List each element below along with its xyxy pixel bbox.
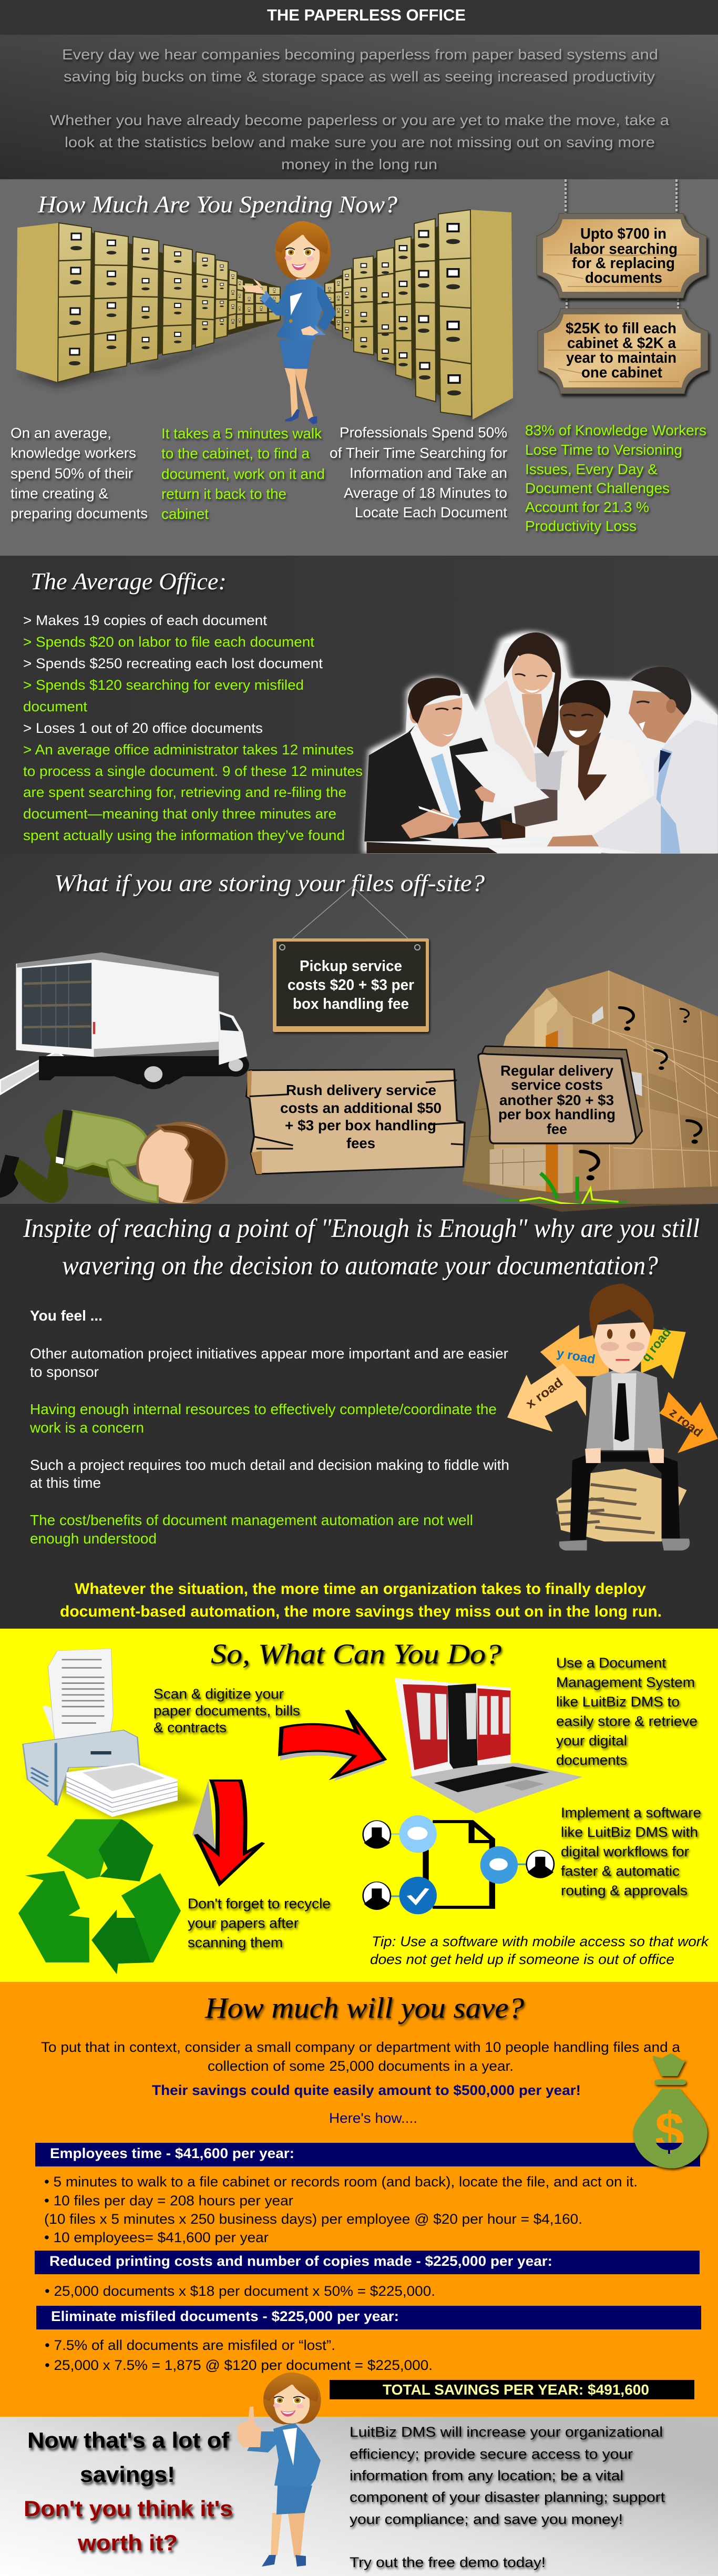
panel: the average office <box>0 556 718 854</box>
text: you feel reasons: to sponsor <box>30 1364 99 1380</box>
text: luitbiz dms benefits <box>350 2424 665 2570</box>
illustration: confused man with road arrows: x road <box>524 1375 566 1412</box>
text: versioning issues: Lose Time to Versioning <box>525 442 682 458</box>
heading: how much are you spending: How Much Are You Spending Now? <box>37 191 397 218</box>
arrow: scan to laptop <box>280 1710 385 1781</box>
text: scan and digitize: & contracts <box>153 1720 227 1735</box>
bar: reduced printing costs <box>35 2251 700 2274</box>
bar: total savings <box>330 2380 694 2399</box>
heading: the average office: The Average Office: <box>30 568 227 595</box>
list: office facts: > Spends $20 on labor to file each document <box>23 634 315 650</box>
text: you feel reasons: You feel ... <box>30 1307 102 1324</box>
arrow: scan to recycle <box>192 1781 263 1885</box>
heading: enough is enough <box>23 1214 700 1281</box>
icon: recycle symbol <box>18 1819 181 1974</box>
text: professionals searching: Locate Each Document <box>355 504 507 520</box>
text: knowledge workers: On an average, <box>11 425 111 441</box>
chalkboard sign: pickup: box handling fee <box>293 996 409 1013</box>
text: versioning issues: Document Challenges <box>525 480 670 496</box>
text: professionals searching: Average of 18 Minutes to <box>344 485 507 501</box>
text: you feel reasons: at this time <box>30 1475 101 1491</box>
paper sign: regular delivery: per box handling <box>498 1106 616 1122</box>
text: luitbiz dms benefits: component of your disaster planning; support <box>350 2489 665 2505</box>
text: you feel reasons: Having enough internal resources to effectively complete/coordinate the <box>30 1401 497 1417</box>
panel: how much are you spending <box>0 179 718 556</box>
text: 5 minute walk: to the cabinet, to find a <box>161 445 310 462</box>
panel: off-site storage <box>0 854 718 1212</box>
bar: employees time: Employees time - $41,600 per year: <box>50 2145 294 2161</box>
text: context: Here's how.... <box>329 2110 417 2126</box>
list: office facts: to process a single document. 9 of these 12 minutes <box>23 763 363 779</box>
bar: total savings: TOTAL SAVINGS PER YEAR: $491,600 <box>383 2381 649 2398</box>
text: recycle your papers: scanning them <box>188 1935 283 1950</box>
wood sign: labor cost: labor searching <box>569 241 678 258</box>
text: that's a lot of savings <box>24 2428 233 2555</box>
paper sign: regular delivery <box>478 1046 642 1143</box>
text: digital workflows: faster & automatic <box>561 1863 680 1879</box>
text: luitbiz dms benefits: LuitBiz DMS will increase your organizational <box>350 2424 663 2440</box>
illustration: laptop with binders <box>395 1678 582 1813</box>
text: employee time details <box>44 2174 638 2245</box>
text: document management system: documents <box>556 1752 627 1768</box>
illustration: confused man with road arrows: y road <box>556 1346 597 1367</box>
text: misfiled details: • 7.5% of all documents are misfiled or “lost”. <box>45 2337 335 2353</box>
illustration: box pallets <box>463 970 718 1212</box>
text: knowledge workers: spend 50% of their <box>11 465 133 482</box>
illustration: businesswoman presenting <box>242 221 336 424</box>
text: document management system: Use a Document <box>556 1655 666 1671</box>
illustration: businesswoman thumbs up <box>238 2373 321 2567</box>
icon: digital workflow <box>363 1815 554 1914</box>
panel: closing call to action <box>0 2373 718 2576</box>
text: digital workflows: like LuitBiz DMS with <box>561 1824 698 1840</box>
text: context: To put that in context, consider a small company or department with 10 people handling files and a <box>41 2039 681 2055</box>
text: document management system <box>556 1655 698 1768</box>
list: office facts <box>23 612 363 843</box>
list: office facts: spent actually using the information they’ve found <box>23 827 345 843</box>
text: luitbiz dms benefits: Try out the free demo today! <box>350 2554 546 2570</box>
wood sign: cabinet cost: one cabinet <box>581 364 662 381</box>
list: office facts: > Makes 19 copies of each document <box>23 612 268 628</box>
text: professionals searching: of Their Time Searching for <box>330 445 507 461</box>
text: knowledge workers: time creating & <box>11 485 108 502</box>
illustration: confused man with road arrows: q road <box>639 1325 674 1365</box>
illustration: moving truck <box>0 953 249 1095</box>
title: THE PAPERLESS OFFICE <box>267 6 466 24</box>
text: 5 minute walk: It takes a 5 minutes walk <box>161 425 322 442</box>
text: context: collection of some 25,000 documents in a year. <box>208 2058 514 2074</box>
text: employee time details: (10 files x 5 minutes x 250 business days) per employee @ $20 per hour = $4,160. <box>44 2211 582 2227</box>
text: versioning issues: Issues, Every Day & <box>525 461 658 477</box>
text: 5 minute walk: document, work on it and <box>161 466 325 482</box>
panel: header bar <box>0 0 718 35</box>
text: versioning issues: Account for 21.3 % <box>525 499 649 515</box>
text: professionals searching <box>330 424 507 520</box>
bar: eliminate misfiled documents: Eliminate misfiled documents - $225,000 per year: <box>51 2308 399 2324</box>
wood sign: cabinet cost: year to maintain <box>566 350 676 366</box>
intro paragraph: money in the long run <box>281 156 437 172</box>
text: that's a lot of savings: Now that's a lot of <box>27 2428 230 2452</box>
plank sign: rush delivery: Rush delivery service <box>286 1082 436 1098</box>
wood sign: labor cost: Upto $700 in <box>580 226 666 242</box>
text: employee time details: • 10 files per day = 208 hours per year <box>44 2193 293 2209</box>
text: you feel reasons: The cost/benefits of document management automation are not well <box>30 1512 473 1528</box>
file cabinets: right row <box>325 210 513 421</box>
wood sign: labor cost: for & replacing <box>572 255 675 272</box>
text: you feel reasons: Such a project requires too much detail and decision making to fiddle with <box>30 1457 509 1473</box>
intro paragraph: look at the statistics below and make sure you are not missing out on saving more <box>65 134 655 150</box>
text: document management system: easily store & retrieve <box>556 1713 698 1729</box>
panel: how much will you save <box>0 1982 718 2417</box>
paper sign: regular delivery: Regular delivery <box>500 1062 613 1079</box>
text: digital workflows: Implement a software <box>561 1805 701 1821</box>
heading: how much will you save: How much will you save? <box>204 1992 524 2025</box>
wood sign: cabinet cost: cabinet & $2K a <box>567 335 676 352</box>
text: scan and digitize: Scan & digitize your <box>153 1686 284 1702</box>
text: that's a lot of savings: savings! <box>80 2462 175 2487</box>
text: mobile access tip: does not get held up if someone is out of office <box>370 1951 674 1967</box>
list: office facts: document—meaning that only three minutes are <box>23 806 336 822</box>
text: knowledge workers: preparing documents <box>11 505 148 522</box>
text: luitbiz dms benefits: efficiency; provide secure access to your <box>350 2446 633 2462</box>
paper sign: regular delivery: service costs <box>511 1077 603 1093</box>
illustration: confused man with road arrows: z road <box>666 1405 705 1440</box>
plank sign: rush delivery: fees <box>346 1135 375 1151</box>
plank sign: rush delivery: + $3 per box handling <box>285 1117 436 1133</box>
text: document management system: Management System <box>556 1674 695 1690</box>
text: recycle your papers: your papers after <box>188 1915 299 1931</box>
text: luitbiz dms benefits: information from any location; be a vital <box>350 2468 623 2483</box>
intro paragraph: saving big bucks on time & storage space as well as seeing increased productivity <box>64 68 655 85</box>
text: printing details: • 25,000 documents x $18 per document x 50% = $225,000. <box>45 2283 435 2299</box>
text: you feel reasons: work is a concern <box>29 1419 144 1436</box>
intro paragraph: Whether you have already become paperless or you are yet to make the move, take a <box>50 112 669 128</box>
text: 5 minute walk <box>161 425 325 522</box>
text: that's a lot of savings: worth it? <box>77 2530 178 2555</box>
text: you feel reasons: enough understood <box>30 1530 157 1547</box>
text: professionals searching: Professionals Spend 50% <box>340 424 507 441</box>
text: luitbiz dms benefits: your compliance; and save you money! <box>350 2511 623 2527</box>
text: misfiled details <box>45 2337 433 2373</box>
list: office facts: document <box>23 699 88 714</box>
text: document management system: like LuitBiz DMS to <box>556 1694 680 1710</box>
text: mobile access tip <box>370 1934 710 1967</box>
list: office facts: > Spends $120 searching for every misfiled <box>23 677 304 693</box>
illustration: confused man with road arrows <box>507 1284 718 1550</box>
callout: whatever the situation: document-based automation, the more savings they miss out on in the long run. <box>60 1603 662 1620</box>
icon: money bag <box>633 2053 707 2169</box>
text: versioning issues <box>525 422 706 534</box>
text: digital workflows: routing & approvals <box>561 1883 688 1898</box>
text: employee time details: • 5 minutes to walk to a file cabinet or records room (and back), locate the file, and act on it. <box>44 2174 638 2190</box>
paper sign: regular delivery: another $20 + $3 <box>499 1092 614 1108</box>
photo: office team <box>363 632 718 853</box>
wood sign: cabinet cost: $25K to fill each <box>566 320 676 337</box>
wood sign: labor cost <box>537 213 706 298</box>
list: office facts: > Loses 1 out of 20 office documents <box>23 720 263 736</box>
list: office facts: > An average office administrator takes 12 minutes <box>23 742 354 758</box>
chalkboard sign: pickup: costs $20 + $3 per <box>288 977 414 994</box>
heading: enough is enough: wavering on the decision to automate your documentation? <box>62 1251 658 1281</box>
text: scan and digitize: paper documents, bills <box>153 1703 300 1719</box>
text: recycle your papers: Don't forget to recycle <box>188 1896 331 1911</box>
intro paragraph: Every day we hear companies becoming paperless from paper based systems and <box>62 46 658 63</box>
text: knowledge workers: knowledge workers <box>11 445 136 461</box>
text: scan and digitize <box>153 1686 300 1735</box>
text: 5 minute walk: cabinet <box>161 506 209 522</box>
text: versioning issues: 83% of Knowledge Workers <box>525 422 706 438</box>
plank sign: rush delivery: costs an additional $50 <box>280 1100 442 1116</box>
text: 5 minute walk: return it back to the <box>161 486 286 502</box>
text: document management system: your digital <box>556 1733 627 1749</box>
text: context <box>41 2039 681 2126</box>
plank sign: rush delivery <box>247 1069 465 1174</box>
illustration: printer scanning <box>23 1649 201 1819</box>
list: office facts: are spent searching for, retrieving and re-filing the <box>23 784 346 800</box>
text: employee time details: • 10 employees= $41,600 per year <box>44 2230 269 2245</box>
panel: so what can you do <box>0 1629 718 1982</box>
heading: so what can you do: So, What Can You Do? <box>211 1638 501 1670</box>
bar: reduced printing costs: Reduced printing costs and number of copies made - $225,000 per year: <box>49 2253 552 2269</box>
chalkboard sign: pickup <box>273 887 429 1032</box>
text: digital workflows <box>561 1805 701 1898</box>
panel: intro <box>0 35 718 179</box>
text: digital workflows: digital workflows for <box>561 1844 689 1859</box>
text: context: Their savings could quite easily amount to $500,000 per year! <box>152 2082 581 2098</box>
wood sign: labor cost: documents <box>585 270 662 287</box>
text: that's a lot of savings: Don't you think it's <box>24 2496 233 2521</box>
text: misfiled details: • 25,000 x 7.5% = 1,875 @ $120 per document = $225,000. <box>45 2357 433 2373</box>
wood sign: cabinet cost <box>538 309 708 394</box>
text: professionals searching: Information and Take an <box>350 465 507 481</box>
text: versioning issues: Productivity Loss <box>525 518 637 534</box>
text: knowledge workers <box>11 425 148 522</box>
paper sign: regular delivery: fee <box>547 1121 567 1137</box>
callout: whatever the situation <box>60 1580 662 1620</box>
list: office facts: > Spends $250 recreating each lost document <box>23 656 323 671</box>
file cabinets: left row <box>16 223 284 386</box>
text: you feel reasons <box>29 1307 509 1547</box>
text: mobile access tip: Tip: Use a software with mobile access so that work <box>372 1934 710 1949</box>
text: you feel reasons: Other automation project initiatives appear more important and are easier <box>30 1345 508 1362</box>
heading: off-site storage: What if you are storing your files off-site? <box>54 870 485 896</box>
intro paragraph <box>50 46 669 172</box>
callout: whatever the situation: Whatever the situation, the more time an organization takes to finally deploy <box>75 1580 646 1598</box>
illustration: exhausted man on floor <box>0 1110 227 1204</box>
chalkboard sign: pickup: Pickup service <box>300 958 402 975</box>
bar: employees time <box>35 2143 700 2166</box>
text: recycle your papers <box>188 1896 331 1950</box>
panel: why still wavering <box>0 1204 718 1629</box>
icon: money bag: $ <box>655 2102 684 2161</box>
chains <box>566 179 678 309</box>
bar: eliminate misfiled documents <box>36 2306 701 2329</box>
